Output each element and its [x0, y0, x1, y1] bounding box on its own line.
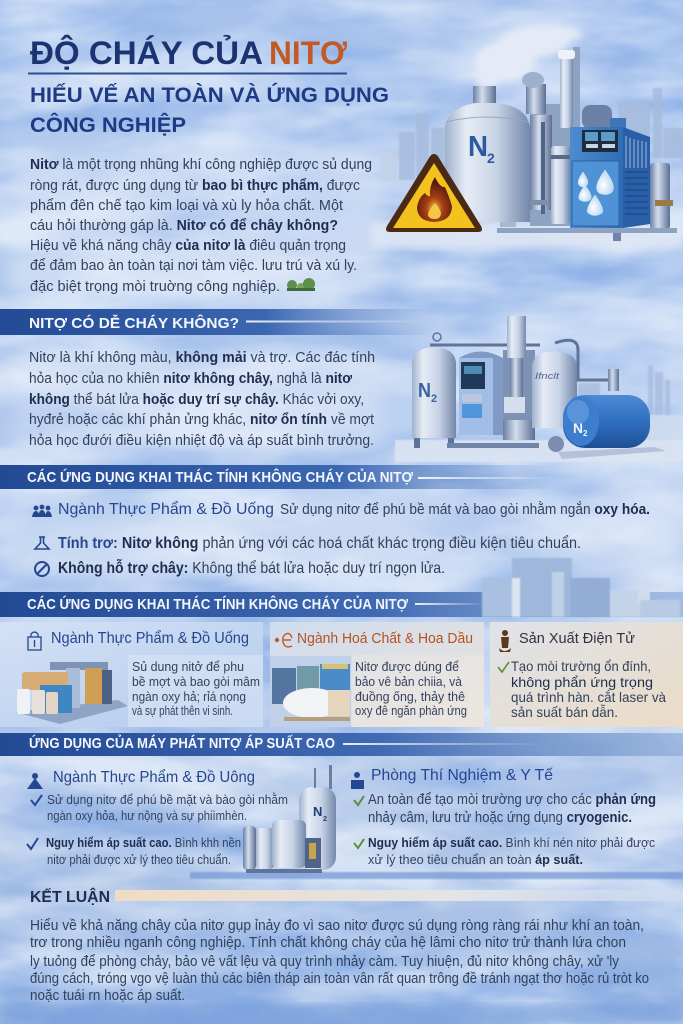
icon: green leaves — [287, 278, 315, 291]
hero illustration: nitrogen plant — [370, 27, 683, 248]
section banner: is nitrogen flammable — [0, 309, 440, 335]
paragraph: nitrogen properties: hỏa học đưới điều kiện nhiệt độ và áp suất bình trưởng. — [29, 432, 374, 449]
control cabinet — [459, 352, 503, 435]
section banner: applications 1 — [0, 465, 560, 489]
icon: orange symbol — [276, 634, 292, 647]
row: food and drink: Sử dụng nitơ để phú bề mát và bao gòi nhằm ngắn oxy hóa. — [280, 501, 650, 518]
panel: food and drink, high pressure — [27, 768, 288, 867]
card: chemicals and petrochemicals: Nitơ được dúng để — [355, 659, 459, 674]
blue horizontal N2 tank: 2 — [583, 429, 588, 438]
large N2 tank: 2 — [487, 150, 495, 166]
blue horizontal N2 tank: N — [573, 420, 583, 436]
card: chemicals and petrochemicals — [270, 622, 484, 727]
section banner: applications 2 — [0, 592, 683, 617]
card: chemicals and petrochemicals: Ngành Hoá Chất & Hoa Dầu — [297, 630, 473, 647]
illustration: packaged goods on pallet — [15, 662, 128, 724]
skyline over third banner — [482, 558, 680, 617]
icon: water drops — [578, 170, 613, 216]
illustration: machines and white wrap — [270, 656, 351, 727]
pipes — [430, 340, 612, 380]
row: inertness: Tính trơ: Nitơ không phản ứng với các hoá chất khác trọng điều kiện tiêu chuẩn. — [58, 534, 581, 552]
paragraph: nitrogen properties — [29, 349, 375, 449]
paragraph: nitrogen properties: không thể bát lửa hoặc duy trí sự chây. Khác vởi oxy, — [29, 391, 364, 408]
intro paragraph: đặc biệt trọng mòi truờng công nghiệp. — [30, 278, 280, 295]
icon: flammable warning sign — [386, 154, 482, 232]
conclusion text: ly tuỏng để phòng chảy, bảo vê vất lệu và quy trình nhảy càm. Tuy hiuện, đủ nitơ không chây, xử 'ly — [30, 954, 620, 970]
row: food and drink: Ngành Thực Phẩm & Đồ Uống — [58, 500, 274, 518]
panel: food and drink, high pressure: Ngành Thực Phẩm & Đồ Uông — [53, 768, 255, 786]
intro paragraph: để đảm bao àn toàn tại nơi tàm việc. lưu trú và xú ly. — [30, 257, 357, 274]
card: electronics: quá trình hàn. cắt laser và — [511, 689, 666, 705]
large N2 tank — [445, 86, 530, 222]
row: no combustion support: Không hỗ trợ chây: Không thể bát lửa hoặc duy trí ngọn lửa. — [58, 558, 445, 577]
intro paragraph: ròng rát, được úng dụng từ bao bì thực phẩm, được — [30, 177, 360, 194]
icon: flask — [35, 537, 49, 549]
skyline — [578, 365, 683, 440]
intro paragraph: phẩm đên chế tạo kim loại và xù ly hỏa chất. Một — [30, 197, 344, 214]
panel: food and drink, high pressure: nitơ phải được xử lý theo tiêu chuẩn. — [47, 852, 231, 867]
card: electronics — [490, 622, 683, 727]
intro paragraph: Hiệu về khá năng chây của nitơ là điêu quản trọng — [30, 237, 346, 254]
conclusion text: Hiểu về khả năng chây của nitơ gụp ỉnảy đo vì sao nitơ được sú dụng ròng ràng rái như khí an toàn, — [30, 918, 644, 934]
section banner: is nitrogen flammable: NITỢ CÓ DỄ CHÁY KHÔNG? — [29, 314, 239, 332]
icon: triangle people — [27, 773, 43, 789]
card: electronics: Sản Xuất Điện Tử — [519, 630, 635, 647]
card: food and drink: Sủ dung nitở để phu — [132, 659, 244, 674]
title — [28, 35, 348, 74]
section banner: applications 2: CÁC ỨNG DỤNG KHAI THÁC TÍNH KHÔNG CHÁY CỦA NITỢ — [27, 595, 408, 613]
card: chemicals and petrochemicals: bảo vê bản chiia, và — [355, 674, 463, 689]
card: food and drink — [0, 622, 263, 727]
panel: food and drink, high pressure: Sử dụng nitơ để phú bề mặt và bào gòi nhằm — [47, 792, 288, 807]
illustration: N2 tank and cylinders: 2 — [323, 816, 327, 823]
section banner: applications 1: CÁC ỨNG DỤNG KHAI THÁC TÍNH KHÔNG CHÁY CỦA NITỢ — [27, 468, 413, 486]
card: chemicals and petrochemicals: đuồng ống, thảy thê — [355, 689, 465, 704]
panel: laboratory and medical: xử lý theo tiêu chuẩn an toàn áp suất. — [368, 852, 583, 867]
section banner: high pressure generators — [0, 733, 683, 756]
icon: check — [354, 839, 364, 848]
columns and pipes — [530, 104, 572, 226]
conclusion heading — [30, 887, 683, 906]
card: electronics: không phẩn ứng trọng — [511, 674, 653, 690]
title: ĐỘ CHÁY CỦA — [30, 35, 263, 71]
subtitle: CÔNG NGHIỆP — [30, 113, 186, 137]
card: food and drink: bề mợt và bao gòi mâm — [132, 674, 260, 689]
panel: laboratory and medical: Phòng Thí Nghiệm & Y Tế — [371, 767, 553, 784]
panel: laboratory and medical: An toàn để tạo mòi trường ượ cho các phản ứng — [368, 792, 656, 808]
panel: laboratory and medical: Nguy hiểm áp suất cao. Bình khí nén nitơ phải được — [368, 835, 655, 850]
conclusion text — [30, 918, 649, 1004]
icon: lock box — [28, 632, 41, 650]
left tank: N — [418, 380, 431, 402]
card: electronics: Tạo mòi trường ổn đính, — [511, 658, 651, 674]
card: electronics: sản suất bán dẫn. — [511, 704, 618, 720]
icon: check — [27, 838, 38, 849]
illustration: nitrogen generator set — [395, 316, 683, 462]
intro paragraph — [30, 156, 372, 295]
ground haze — [370, 222, 683, 248]
conclusion heading: KẾT LUẬN — [30, 887, 110, 906]
icon: people — [32, 505, 52, 517]
panel: food and drink, high pressure: ngàn oxy hỏa, hư nộng và sự phiìmhèn. — [47, 808, 247, 823]
panel: food and drink, high pressure: Nguy hiểm áp suất cao. Bình khh nền — [46, 835, 241, 850]
blue generator unit — [570, 127, 650, 228]
section banner: high pressure generators: ỨNG DỤNG CỦA MÁY PHÁT NITỢ ÁP SUẤT CAO — [29, 734, 335, 752]
card: chemicals and petrochemicals: oxy đê ngăn phàn ứng — [355, 703, 467, 718]
icon: check — [498, 662, 509, 672]
skyline — [380, 88, 683, 181]
large N2 tank: N — [468, 131, 488, 163]
subtitle: HIẾU VẾ AN TOÀN VÀ ỨNG DỤNG — [30, 83, 389, 107]
panel: laboratory and medical — [351, 767, 656, 867]
paragraph: nitrogen properties: Nitơ là khí không màu, không mải và trợ. Các đác tính — [29, 349, 375, 366]
card: food and drink: và sự phát thên vi sinh. — [132, 703, 233, 718]
icon: check — [354, 796, 364, 805]
illustration: N2 tank and cylinders — [243, 765, 336, 873]
intro paragraph: cáu hỏi thường gáp là. Nitơ có để chây không? — [30, 217, 338, 234]
left tank: 2 — [431, 393, 437, 405]
icon: check — [31, 795, 42, 805]
conclusion text: noặc tuái rn hoặc áp suất. — [30, 988, 185, 1004]
platform — [447, 443, 539, 448]
subtitle — [30, 83, 389, 137]
icon: person — [351, 772, 364, 789]
panel: laboratory and medical: nhảy câm, lưu trử hoặc ứng dụng cryogenic. — [368, 810, 632, 826]
left tank — [412, 347, 456, 448]
blue horizontal N2 tank — [563, 395, 650, 448]
icon: figure — [499, 630, 511, 652]
conclusion text: trơ trong nhiều nganh công nghiệp. Tính chất không cháy của hệ lâmi cho nitơ trử thành lứa chon — [30, 935, 626, 951]
title: NITƠ — [269, 35, 348, 71]
ground — [395, 440, 683, 462]
icon: prohibited circle — [35, 562, 49, 576]
right tank — [532, 351, 577, 428]
paragraph: nitrogen properties: hyđrẻ hoặc các khí phản ửng khác, nitơ ổn tính về mợt — [29, 411, 375, 428]
right tank: Ifnclt — [535, 371, 560, 381]
card: food and drink: Ngành Thực Phẩm & Đồ Uống — [51, 629, 249, 647]
illustration: N2 tank and cylinders: N — [313, 804, 322, 819]
smoke — [475, 27, 582, 90]
intro paragraph: Nitơ là một trọng nhũng khí công nghiệp được sủ dụng — [30, 156, 372, 173]
cylinder right — [650, 163, 670, 229]
paragraph: nitrogen properties: hỏa học của no khiên nitơ không chây, nghả là nitơ — [29, 370, 352, 387]
card: food and drink: ngàn oxy hả; rỉá nọng — [132, 689, 246, 704]
row: food and drink — [32, 500, 650, 518]
platform — [497, 228, 677, 233]
